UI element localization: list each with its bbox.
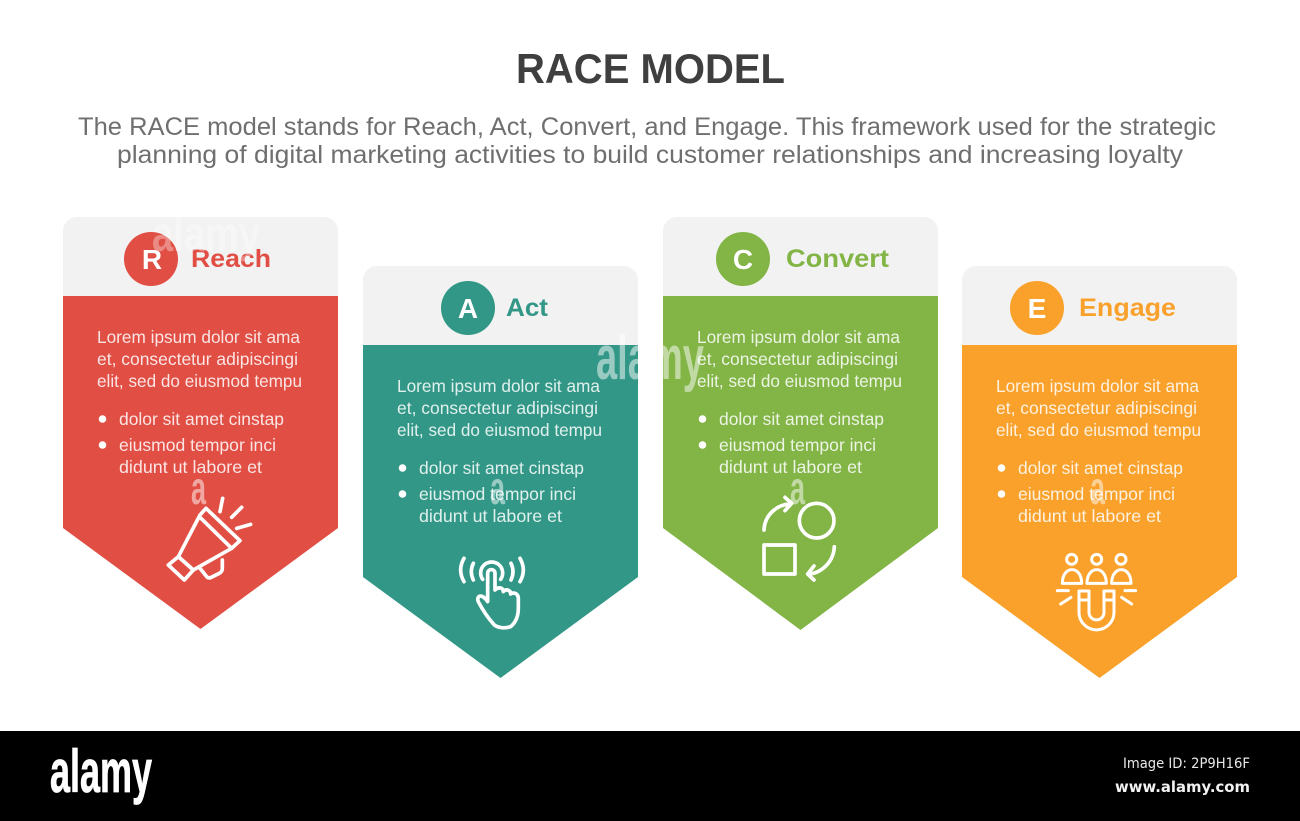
text block: engage description: elit, sed do eiusmod tempu [996,420,1201,440]
title: RACE MODEL [516,45,785,92]
heading: engage: Engage [1079,294,1176,322]
text block: reach description: didunt ut labore et [119,457,262,477]
panel: reach [63,217,338,629]
text block: engage description [996,376,1201,526]
text block: act description: dolor sit amet cinstap [419,458,584,478]
text block: convert description: Lorem ipsum dolor sit ama [697,327,900,347]
footer logo: alamy [50,738,152,805]
text block: act description: eiusmod tempor inci [419,484,576,504]
footer bar [0,731,1300,821]
heading: reach: Reach [191,245,271,273]
subtitle text [78,113,1216,169]
watermark overlays: alamy [152,206,260,262]
watermark overlays: a [191,462,206,514]
icon: letter C badge [716,232,770,286]
website: www.alamy.com [1115,778,1250,796]
text block: reach description: et, consectetur adipiscingi [97,349,298,369]
text block: convert description: elit, sed do eiusmod tempu [697,371,902,391]
text block: reach description: Lorem ipsum dolor sit ama [97,327,300,347]
watermark overlays [152,206,1105,514]
text block: convert description: eiusmod tempor inci [719,435,876,455]
text block: convert description: dolor sit amet cinstap [719,409,884,429]
watermark overlays: a [1090,462,1105,514]
text block: engage description: eiusmod tempor inci [1018,484,1175,504]
text block: convert description: didunt ut labore et [719,457,862,477]
text block: act description: didunt ut labore et [419,506,562,526]
icon: magnet attracting people [1057,554,1136,630]
watermark overlays: a [790,462,805,514]
icon: letter R badge [124,232,178,286]
text block: reach description: dolor sit amet cinstap [119,409,284,429]
panel: act [363,266,638,678]
icon: letter R badge: R [142,244,162,275]
text block: engage description: Lorem ipsum dolor sit ama [996,376,1199,396]
text block: act description: elit, sed do eiusmod tempu [397,420,602,440]
text block: act description: et, consectetur adipiscingi [397,398,598,418]
subtitle text: The RACE model stands for Reach, Act, Convert, and Engage. This framework used for the strategic [78,113,1216,141]
text block: act description: Lorem ipsum dolor sit ama [397,376,600,396]
icon: letter A badge [441,281,495,335]
icon: shape conversion cycle [764,497,834,580]
icon: letter A badge: A [458,293,478,324]
text block: convert description: et, consectetur adipiscingi [697,349,898,369]
heading: convert: Convert [786,245,890,273]
heading: act: Act [506,294,549,322]
icon: tapping hand [461,558,523,628]
text block: reach description: eiusmod tempor inci [119,435,276,455]
subtitle text: planning of digital marketing activities to build customer relationships and increasing loyalty [117,141,1184,169]
text block: engage description: dolor sit amet cinstap [1018,458,1183,478]
icon: letter E badge [1010,281,1064,335]
watermark overlays: alamy [596,324,704,393]
image id: Image ID: 2P9H16F [1123,756,1250,772]
text block: reach description [97,327,302,477]
panel: engage [962,266,1237,678]
icon: megaphone [168,498,251,580]
icon: letter C badge: C [733,244,753,275]
text block: engage description: didunt ut labore et [1018,506,1161,526]
text block: reach description: elit, sed do eiusmod tempu [97,371,302,391]
panel: convert [663,217,938,630]
text block: act description [397,376,602,526]
icon: letter E badge: E [1028,293,1046,324]
text block: convert description [697,327,902,477]
watermark overlays: a [490,462,505,514]
text block: engage description: et, consectetur adipiscingi [996,398,1197,418]
